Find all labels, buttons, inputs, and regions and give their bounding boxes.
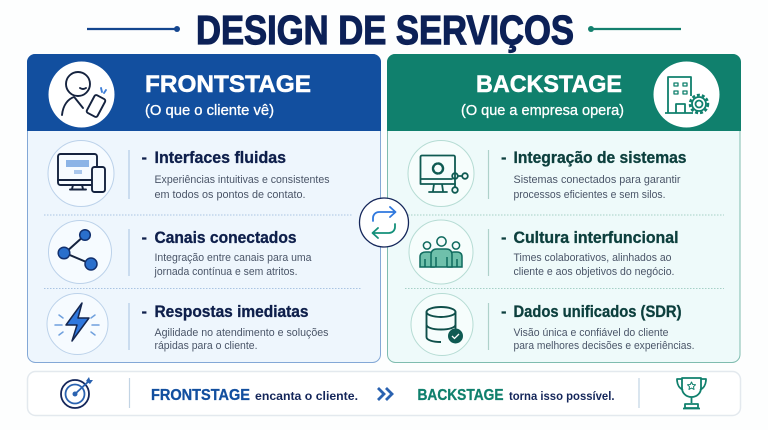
icon: double chevron (378, 388, 392, 400)
backstage header (387, 54, 741, 131)
backstage subtitle: (O que a empresa opera) (461, 103, 624, 119)
item: interfaces fluidas: - (142, 149, 147, 167)
item: dados unificados (411, 294, 694, 356)
item: canais conectados (48, 220, 312, 284)
panel: frontstage (27, 54, 381, 362)
item: canais conectados: Canais conectados (154, 229, 296, 247)
item: interfaces fluidas: em todos os pontos de contato. (154, 189, 306, 201)
icon: lightning bolt (47, 294, 108, 354)
item: canais conectados: - (142, 229, 147, 247)
item: respostas imediatas: rápidas para o cliente. (154, 340, 258, 352)
backstage message (418, 387, 614, 404)
title: DESIGN DE SERVIÇOS (196, 7, 574, 53)
item: respostas imediatas: Agilidade no atendimento e soluções (154, 327, 329, 339)
item: respostas imediatas: Respostas imediatas (154, 303, 308, 321)
frontstage message: FRONTSTAGE (151, 387, 250, 404)
icon: trophy (677, 378, 706, 408)
item: canais conectados: Integração entre canais para uma (154, 252, 312, 264)
item: cultura interfuncional: Times colaborativos, alinhados ao (514, 252, 672, 264)
item: cultura interfuncional: - (501, 229, 506, 247)
icon: share nodes (48, 220, 112, 284)
item: dados unificados: Visão única e confiável do cliente (514, 327, 668, 339)
backstage heading: BACKSTAGE (476, 71, 622, 98)
item: cultura interfuncional: Cultura interfuncional (514, 229, 678, 247)
panel: backstage (387, 54, 741, 362)
frontstage subtitle: (O que o cliente vê) (145, 103, 274, 119)
footer banner (28, 372, 740, 416)
item: integração de sistemas: Sistemas conectados para garantir (514, 174, 681, 186)
icon: team (409, 220, 473, 284)
item: dados unificados: Dados unificados (SDR) (514, 303, 682, 321)
backstage message: torna isso possível. (509, 389, 614, 403)
icon: monitor and phone (48, 140, 114, 206)
icon: target (61, 377, 93, 408)
item: integração de sistemas: Integração de sistemas (514, 149, 686, 167)
backstage message: BACKSTAGE (418, 387, 504, 404)
item: cultura interfuncional (409, 220, 678, 284)
item: dados unificados: para melhores decisões e experiências. (514, 340, 694, 352)
item: dados unificados: - (501, 303, 506, 321)
icon: central exchange arrows (360, 198, 408, 247)
item: integração de sistemas: processos eficientes e sem silos. (514, 189, 666, 201)
item: interfaces fluidas (48, 140, 330, 206)
frontstage heading: FRONTSTAGE (145, 71, 311, 98)
item: cultura interfuncional: cliente e aos objetivos do negócio. (514, 266, 674, 278)
frontstage message (151, 387, 358, 404)
item: integração de sistemas: - (501, 149, 506, 167)
icon: system monitor with nodes (408, 140, 474, 206)
icon: customer with phone (48, 62, 114, 128)
icon: building and gear (654, 62, 720, 128)
item: interfaces fluidas: Interfaces fluidas (154, 149, 286, 167)
item: respostas imediatas (47, 294, 329, 354)
frontstage header (27, 54, 381, 131)
item: interfaces fluidas: Experiências intuitivas e consistentes (154, 174, 330, 186)
icon: database with check (411, 294, 473, 356)
item: canais conectados: jornada contínua e sem atritos. (154, 266, 298, 278)
item: integração de sistemas (408, 140, 686, 206)
item: respostas imediatas: - (142, 303, 147, 321)
frontstage message: encanta o cliente. (255, 389, 358, 403)
